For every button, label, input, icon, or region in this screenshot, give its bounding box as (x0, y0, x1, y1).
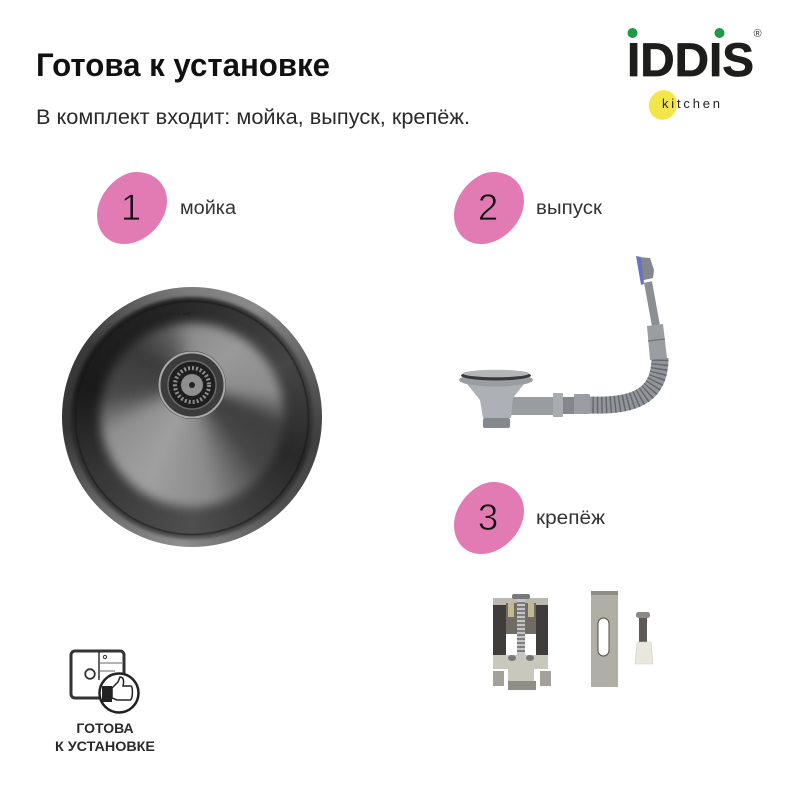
step 1 badge: мойка: 1 (121, 187, 141, 228)
icon caption: ГОТОВА (76, 720, 134, 736)
step 2 badge: выпуск: 2 (478, 187, 498, 228)
corrugated hose (588, 358, 660, 405)
icon caption (55, 720, 155, 754)
logo: IDDIS kitchen: ® (754, 28, 762, 40)
icon caption: К УСТАНОВКЕ (55, 738, 155, 754)
title: Готова к установке (36, 47, 330, 83)
step 3 badge: крепёж: крепёж (536, 508, 605, 529)
logo: IDDIS kitchen (627, 28, 762, 120)
logo: IDDIS kitchen: kitchen (662, 96, 720, 111)
icon: ready to install (70, 650, 140, 714)
step 2 badge: выпуск: выпуск (536, 198, 603, 219)
sink photo (62, 287, 322, 547)
step 2 badge: выпуск (454, 172, 603, 244)
step 1 badge: мойка: мойка (180, 198, 236, 219)
step 3 badge: крепёж (454, 482, 605, 554)
step 1 badge: мойка (97, 172, 236, 244)
overflow head (638, 257, 654, 284)
subtitle text: В комплект входит: мойка, выпуск, крепёж. (36, 106, 470, 129)
drain assembly (459, 256, 668, 428)
step 3 badge: крепёж: 3 (478, 497, 498, 538)
strainer flange (459, 374, 533, 386)
funnel body (467, 384, 524, 418)
horizontal pipe (505, 397, 553, 415)
drain strainer (158, 314, 226, 419)
overflow collar (647, 324, 667, 360)
overflow tube (648, 282, 656, 326)
logo: IDDIS kitchen: IDDIS (627, 33, 754, 86)
